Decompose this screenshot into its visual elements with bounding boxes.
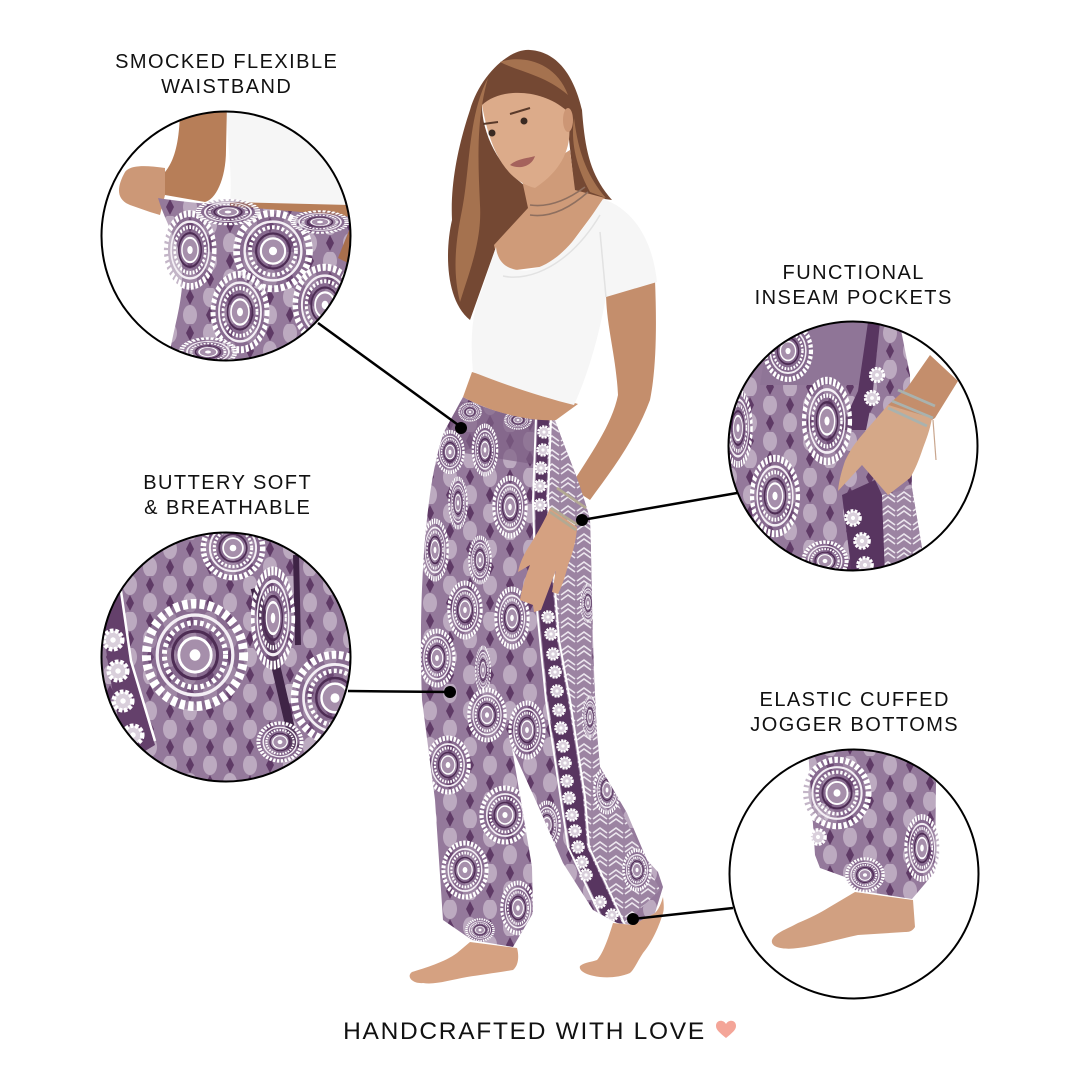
ear: [563, 108, 573, 132]
heading: fabric: BUTTERY SOFT: [143, 472, 312, 494]
heading: pockets: INSEAM POCKETS: [755, 287, 953, 309]
midriff: [463, 372, 578, 420]
leader line: waistband: [318, 323, 461, 427]
hand: [518, 508, 577, 612]
side band: [535, 418, 623, 925]
dot: fabric: [444, 686, 456, 698]
foot: [772, 892, 915, 949]
callout: fabric: [100, 472, 456, 785]
heading: waistband: SMOCKED FLEXIBLE: [115, 51, 338, 73]
callout: pockets: [576, 262, 978, 581]
footer tagline: HANDCRAFTED WITH LOVE: [343, 1018, 706, 1045]
hair: [448, 50, 612, 320]
heading: cuffs: ELASTIC CUFFED: [760, 689, 950, 711]
necklaces: [530, 187, 588, 216]
heading: cuffs: JOGGER BOTTOMS: [750, 714, 959, 736]
leader line: cuffs: [633, 908, 733, 919]
neck and chest: [494, 150, 605, 272]
model figure: [410, 50, 680, 983]
white crop top: [472, 199, 657, 405]
left foot: [410, 942, 518, 983]
heading: fabric: & BREATHABLE: [144, 497, 311, 519]
inset photo: cuffs: [772, 748, 939, 949]
inset photo: pockets: [724, 318, 958, 581]
circle outline: pockets: [728, 322, 978, 570]
right foot: [580, 897, 664, 977]
leader line: fabric: [348, 691, 450, 692]
pants: [420, 397, 663, 947]
circle outline: cuffs: [730, 750, 978, 998]
callout: cuffs: [627, 689, 978, 998]
chevron strip: [546, 418, 660, 925]
lips and eyes: [510, 156, 535, 167]
circle outline: waistband: [102, 112, 350, 360]
hand: [838, 405, 932, 495]
heading: pockets: FUNCTIONAL: [783, 262, 925, 284]
inset photo: fabric: [102, 534, 350, 780]
dot: pockets: [576, 514, 588, 526]
inset photo: waistband: [119, 105, 357, 366]
dot: cuffs: [627, 913, 639, 925]
hair highlights: [456, 59, 606, 302]
heading: waistband: WAISTBAND: [161, 76, 292, 98]
mandalas: [472, 424, 498, 476]
arm: [570, 280, 656, 500]
arm: [888, 355, 958, 420]
dot: waistband: [455, 422, 467, 434]
bracelets: [550, 488, 586, 530]
callout: waistband: [102, 51, 467, 434]
leader line: pockets: [582, 493, 737, 520]
circle outline: fabric: [102, 532, 350, 782]
icon: heart: [716, 1021, 736, 1038]
smocked waist: [446, 401, 565, 466]
face: [482, 93, 569, 188]
